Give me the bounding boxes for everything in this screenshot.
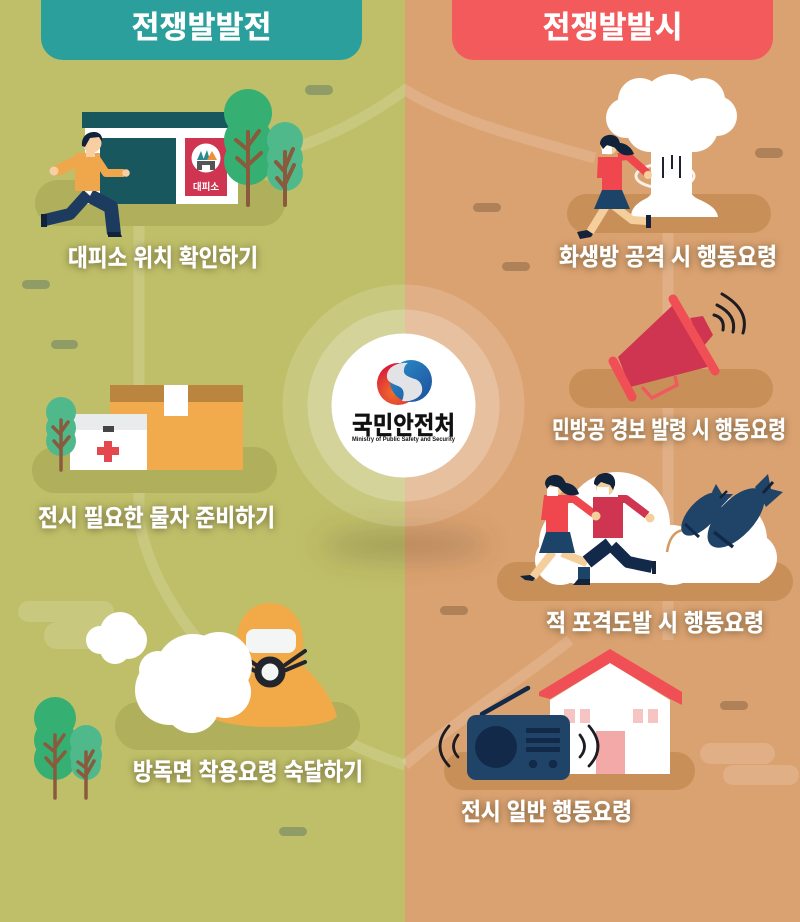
stones <box>22 85 783 836</box>
panel: enemy shelling <box>497 472 793 637</box>
right background <box>405 0 800 922</box>
panel: general conduct <box>440 649 695 826</box>
label: gas mask: 방독면 착용요령 숙달하기 <box>133 759 363 786</box>
logo text: 국민안전처 <box>352 412 455 440</box>
icon: small smoke <box>86 612 147 664</box>
header: during war <box>452 0 773 60</box>
shadow under logo <box>320 531 490 559</box>
icon: explosion cloud <box>535 472 777 585</box>
icon: running man <box>41 132 130 237</box>
icon: trees <box>34 697 102 798</box>
logo english text: Ministry of Public Safety and Security <box>352 436 455 443</box>
icon: hooded figure <box>203 603 337 727</box>
label: shelling: 적 포격도발 시 행동요령 <box>546 610 764 637</box>
icon: trees <box>224 89 303 205</box>
icon: tree <box>46 397 76 470</box>
icon: logo mark <box>377 360 432 405</box>
panel: air raid warning <box>552 294 786 444</box>
icon: running woman <box>577 135 652 239</box>
label: shelter: 대피소 위치 확인하기 <box>68 245 258 272</box>
background stripes <box>18 601 799 785</box>
label: supplies: 전시 필요한 물자 준비하기 <box>38 505 275 532</box>
label: CBRN: 화생방 공격 시 행동요령 <box>559 244 777 271</box>
icon: bombs <box>667 474 783 557</box>
panel: supplies <box>32 385 277 532</box>
header: before war: 전쟁발발전 <box>132 10 272 45</box>
panel: gas mask <box>34 603 363 798</box>
header: during war: 전쟁발발시 <box>542 10 682 45</box>
icon: mushroom cloud <box>606 74 737 217</box>
label: general: 전시 일반 행동요령 <box>461 799 632 826</box>
icon: running couple <box>520 473 656 585</box>
panel: center logo <box>282 284 524 559</box>
panel: CBRN attack <box>559 74 777 271</box>
roads <box>139 90 668 765</box>
icon: radio <box>440 688 598 780</box>
header: before war <box>41 0 362 60</box>
icon: large smoke <box>135 632 252 733</box>
icon: megaphone <box>613 294 744 398</box>
icon: first aid kit <box>70 414 147 470</box>
icon: house <box>539 649 682 774</box>
icon: cardboard box <box>110 385 243 470</box>
panel: shelter <box>35 89 303 272</box>
icon: shelter building <box>82 112 238 204</box>
logo rings <box>282 284 524 526</box>
icon: shelter building: 대피소 <box>193 181 219 193</box>
left background <box>0 0 405 922</box>
